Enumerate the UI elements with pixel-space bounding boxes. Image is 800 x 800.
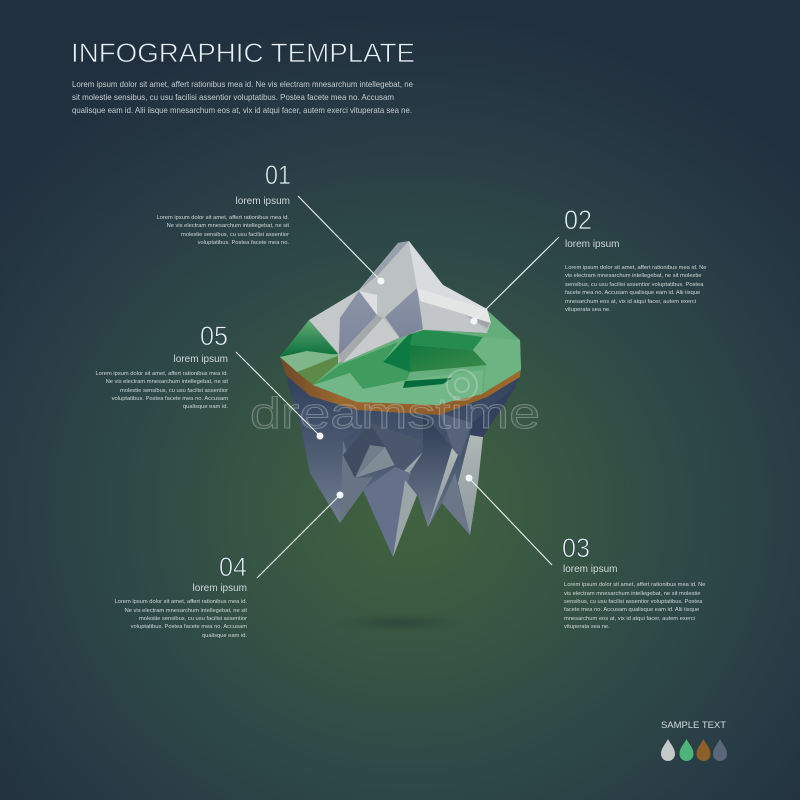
- callout 05: lorem ipsum: [174, 354, 228, 365]
- callout 03: vituperata sea ne.: [564, 624, 610, 630]
- green grass top: [280, 310, 521, 405]
- callout 05: 05: [200, 321, 228, 351]
- callout 05: qualisque eam id.: [183, 404, 228, 410]
- ground shadow: [330, 613, 470, 633]
- callout 05: voluptatibus. Postea facete mea no. Accusam: [112, 396, 228, 402]
- brown soil rim: [280, 357, 521, 415]
- callout 01: molestie sensibus, cu usu facilisi assentior: [181, 232, 289, 238]
- callout 03: facete mea no. Accusam qualisque eam id. Alii iisque: [564, 607, 699, 613]
- callout 04: Lorem ipsum dolor sit amet, affert rationibus mea id.: [114, 599, 247, 605]
- callout 03: lorem ipsum: [563, 564, 617, 575]
- watermark: dreamstime: [250, 389, 540, 438]
- callout 02: mnesarchum eos at, vix id atqui facer, autem exerci: [565, 299, 696, 305]
- callout 01: [156, 160, 384, 284]
- island rock underside: [287, 378, 520, 557]
- callout 05: [95, 321, 324, 440]
- callout 03: vis electram mnesarchum intellegebat, ne sit molestie: [564, 591, 700, 597]
- callout 01: 01: [265, 160, 291, 190]
- callout 01: Ne vis electram mnesarchum intellegebat, ne sit: [167, 223, 289, 229]
- callout 03: mnesarchum eos at, vix id atqui facer, autem exerci: [564, 616, 695, 622]
- callout 04: 04: [219, 552, 247, 582]
- callout 02: vis electram mnesarchum intellegebat, ne sit molestie: [565, 273, 701, 279]
- callout 02: lorem ipsum: [565, 239, 619, 250]
- callout 04: [114, 492, 344, 639]
- title: INFOGRAPHIC TEMPLATE: [71, 38, 415, 68]
- callout 02: [470, 205, 706, 324]
- callout 03: 03: [562, 533, 590, 563]
- callout 04: voluptatibus. Postea facete mea no. Accusam: [131, 624, 247, 630]
- callout 05: molestie sensibus, cu usu facilisi assentior: [120, 388, 228, 394]
- intro text block: Lorem ipsum dolor sit amet, affert rationibus mea id. Ne vis electram mnesarchum intellegebat, ne: [72, 80, 413, 89]
- callout 02: facete mea no. Accusam qualisque eam id. Alii iisque: [565, 290, 700, 296]
- callout 02: sensibus, cu usu facilisi assentior voluptatibus. Postea: [565, 282, 704, 288]
- snowy mountain: [309, 241, 491, 363]
- callout 03: [466, 474, 705, 630]
- legend: [661, 720, 727, 761]
- callout 04: Ne vis electram mnesarchum intellegebat, ne sit: [125, 608, 247, 614]
- callout 01: lorem ipsum: [236, 196, 290, 207]
- callout 05: Lorem ipsum dolor sit amet, affert rationibus mea id.: [95, 371, 228, 377]
- callout 01: voluptatibus. Postea facete mea no.: [198, 240, 289, 246]
- legend label: SAMPLE TEXT: [661, 720, 726, 731]
- callout 04: lorem ipsum: [193, 583, 247, 594]
- callout 02: Lorem ipsum dolor sit amet, affert rationibus mea id. Ne: [565, 265, 706, 271]
- callout 05: Ne vis electram mnesarchum intellegebat, ne sit: [106, 379, 228, 385]
- intro text block: sit molestie sensibus, cu usu facilisi assentior voluptatibus. Postea facete mea no. Accusam: [72, 93, 394, 102]
- intro text block: [72, 80, 413, 115]
- callout 02: 02: [564, 205, 592, 235]
- callout 03: Lorem ipsum dolor sit amet, affert rationibus mea id. Ne: [564, 582, 705, 588]
- legend drops: [661, 739, 727, 761]
- callout 02: vituperata sea ne.: [565, 307, 611, 313]
- callout 04: qualisque eam id.: [202, 633, 247, 639]
- callout 01: Lorem ipsum dolor sit amet, affert rationibus mea id.: [156, 215, 289, 221]
- floating island illustration: [280, 241, 521, 557]
- callout 04: molestie sensibus, cu usu facilisi assentior: [139, 616, 247, 622]
- watermark: [250, 370, 540, 438]
- callout 03: sensibus, cu usu facilisi assentior voluptatibus. Postea: [564, 599, 703, 605]
- intro text block: qualisque eam id. Alii iisque mnesarchum eos at, vix id atqui facer, autem exerci vituperata sea ne.: [72, 106, 412, 115]
